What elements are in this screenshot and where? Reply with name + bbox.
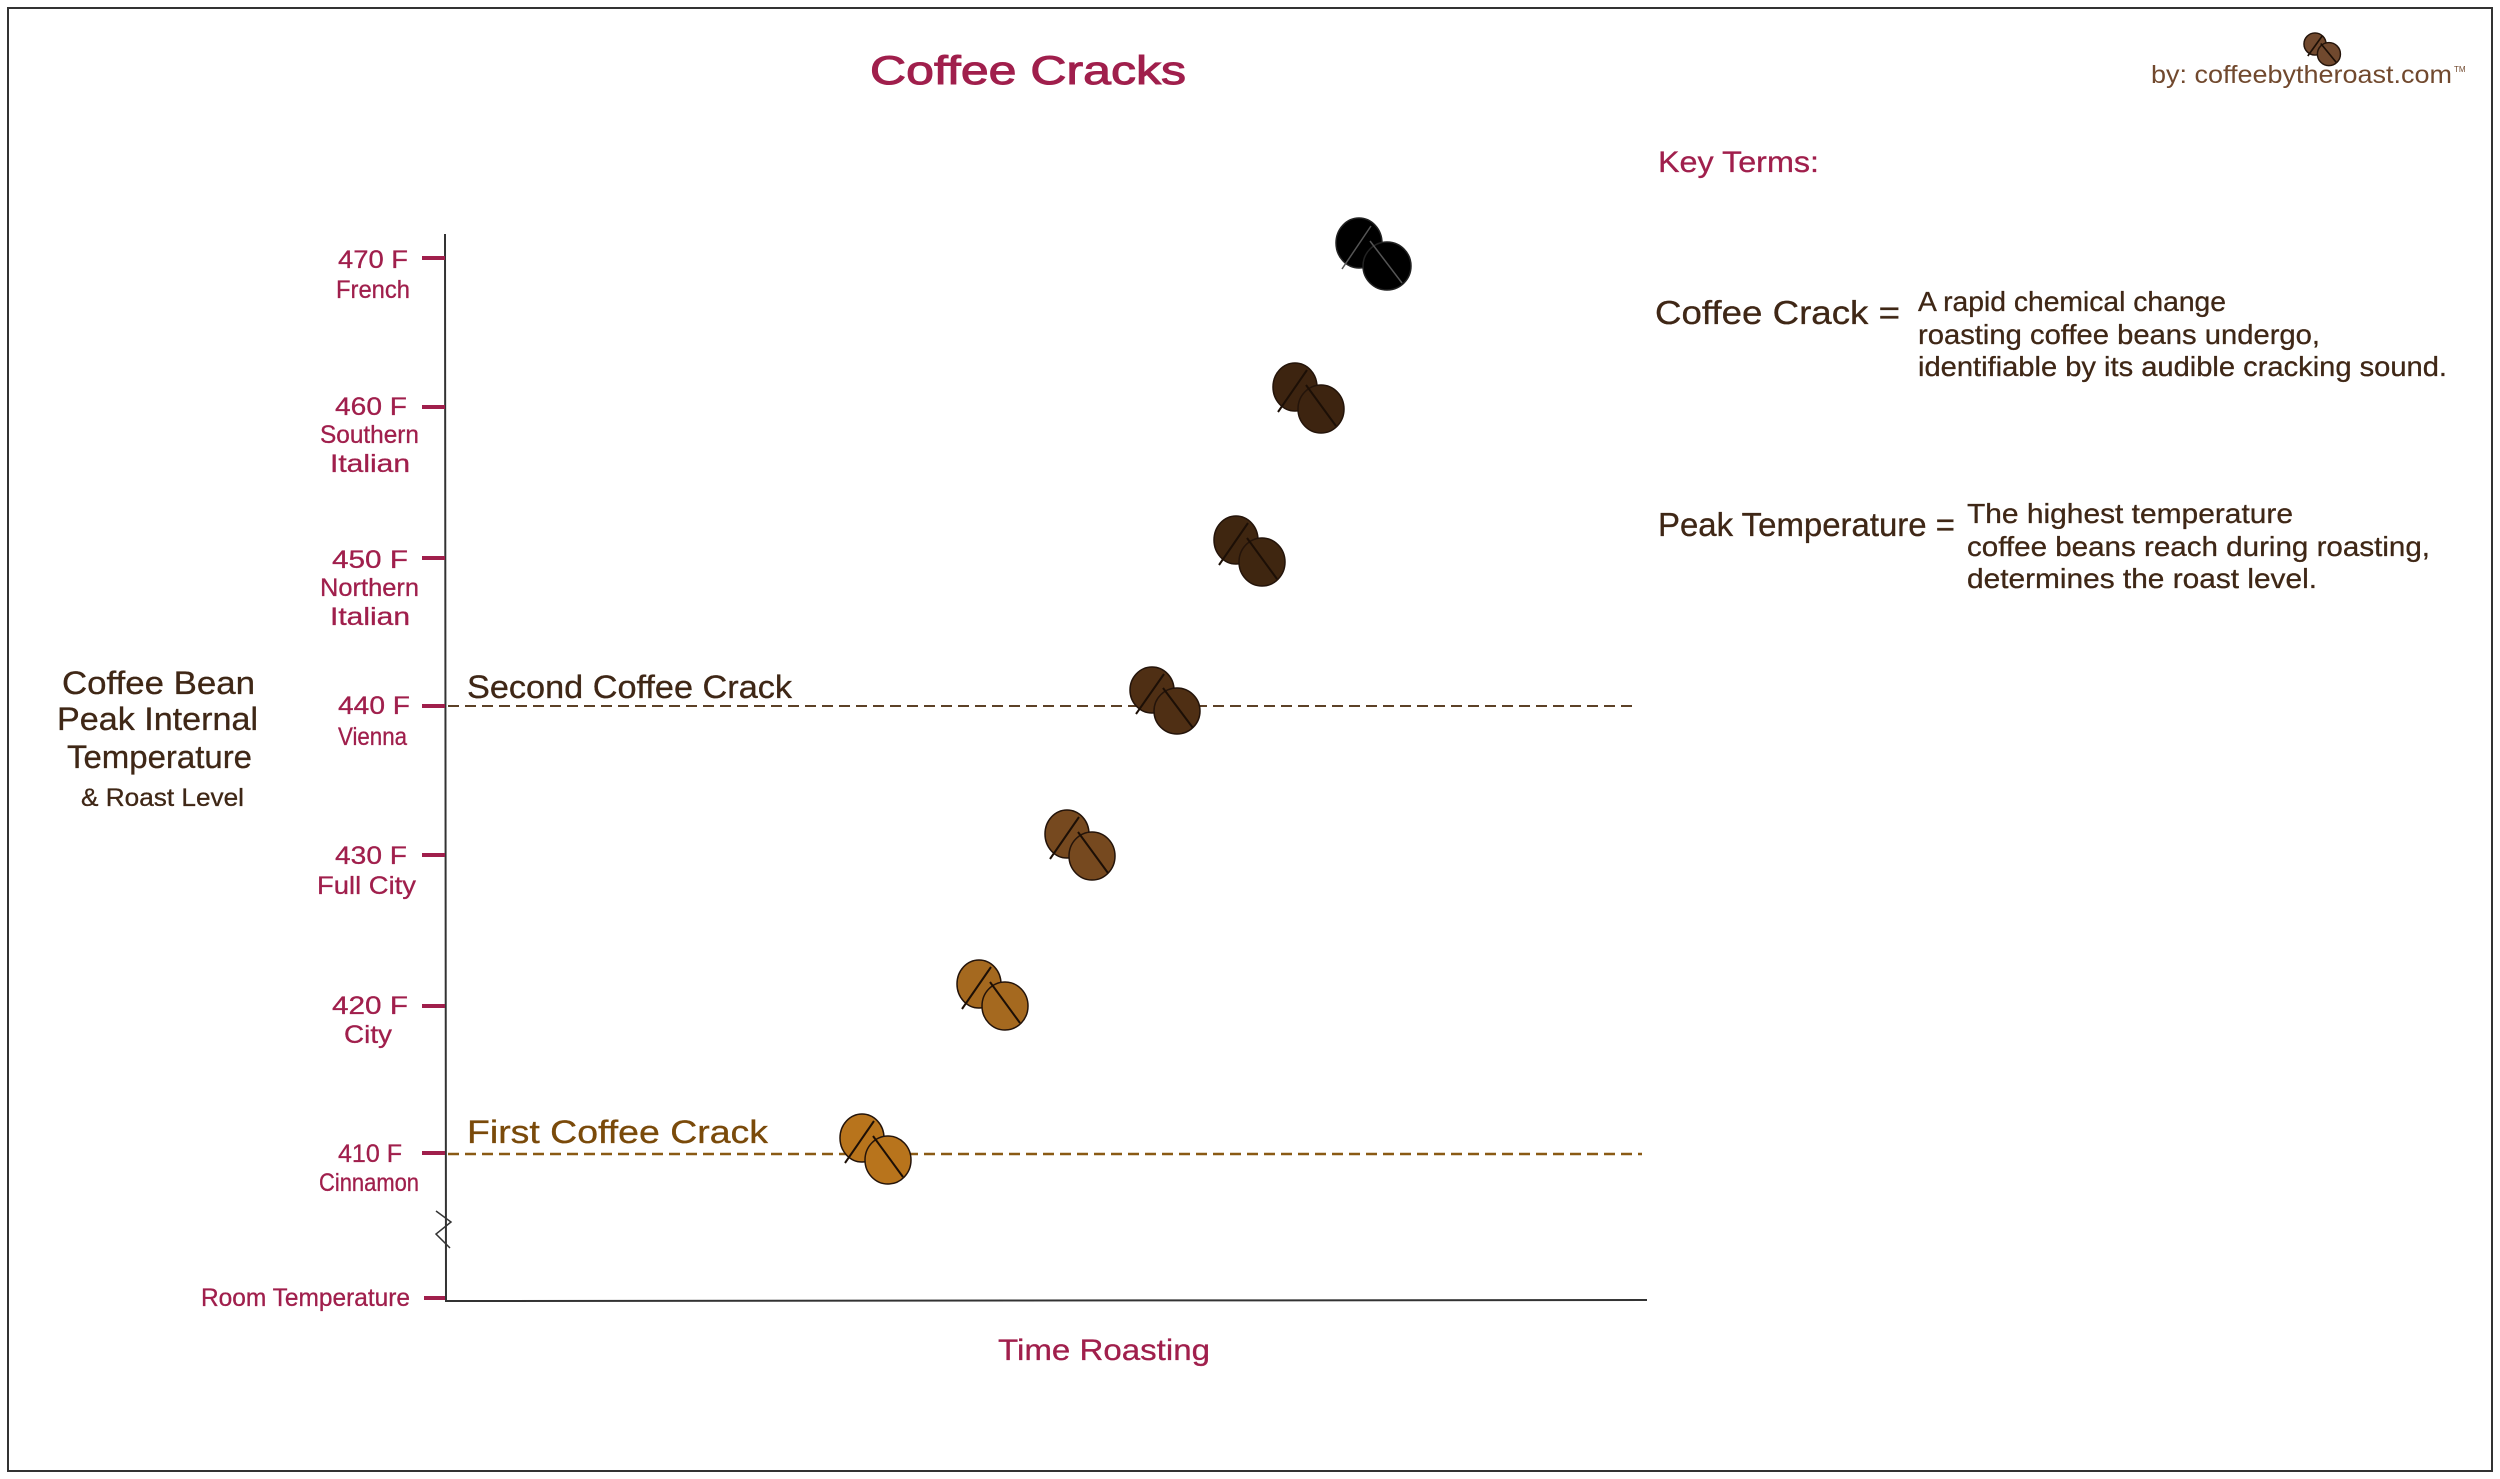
title: Coffee Cracks xyxy=(870,49,1186,93)
definition: coffee crack xyxy=(1918,286,2447,382)
y axis title: Coffee Bean xyxy=(62,665,255,701)
definition: peak temperature: coffee beans reach during roasting, xyxy=(1967,531,2430,562)
dashed line: first coffee crack xyxy=(448,1153,1642,1155)
y axis title xyxy=(57,665,258,812)
label: 470 F French: 470 F xyxy=(338,246,408,274)
logo text: by: coffeebytheroast.com xyxy=(2151,61,2452,89)
beans: cinnamon roast xyxy=(840,1114,911,1184)
definition: peak temperature: The highest temperature xyxy=(1967,498,2293,529)
definition: peak temperature xyxy=(1967,498,2430,594)
label: 460 F Southern Italian: Southern xyxy=(320,421,419,449)
beans: vienna roast xyxy=(1130,667,1200,734)
label: 450 F Northern Italian xyxy=(320,546,419,631)
label: 470 F French: French xyxy=(336,276,410,304)
label: 460 F Southern Italian xyxy=(320,393,419,478)
logo: coffee by the roast xyxy=(2151,33,2466,89)
beans: northern italian roast xyxy=(1214,516,1285,586)
y axis title: Peak Internal xyxy=(57,701,258,737)
label: 420 F City: 420 F xyxy=(332,992,408,1020)
label: 430 F Full City xyxy=(317,842,417,900)
label: 430 F Full City: 430 F xyxy=(335,842,407,870)
trademark: TM xyxy=(2454,65,2466,74)
y axis title: & Roast Level xyxy=(81,784,244,812)
definition: peak temperature: determines the roast level. xyxy=(1967,563,2317,594)
term: coffee crack: Coffee Crack = xyxy=(1655,294,1900,331)
x axis label: Time Roasting xyxy=(998,1334,1210,1367)
label: 410 F Cinnamon: Cinnamon xyxy=(319,1169,419,1197)
icon: logo bean xyxy=(2304,33,2340,66)
chart axes xyxy=(445,234,1647,1301)
label: 450 F Northern Italian: 450 F xyxy=(332,546,408,574)
key terms heading: Key Terms: xyxy=(1658,146,1819,179)
y axis title: Temperature xyxy=(67,739,252,775)
label: first coffee crack: First Coffee Crack xyxy=(467,1114,769,1150)
panel: key terms xyxy=(1655,146,2447,594)
label: 410 F Cinnamon xyxy=(319,1140,419,1197)
label: 430 F Full City: Full City xyxy=(317,872,417,900)
term: peak temperature: Peak Temperature = xyxy=(1658,506,1955,543)
beans: full city roast xyxy=(1045,810,1115,880)
y axis ticks xyxy=(422,258,445,1298)
label: 440 F Vienna xyxy=(338,692,410,751)
beans: city roast xyxy=(957,960,1028,1030)
label: 460 F Southern Italian: 460 F xyxy=(335,393,407,421)
dashed line: second coffee crack xyxy=(448,705,1637,707)
label: 440 F Vienna: 440 F xyxy=(338,692,410,720)
label: second coffee crack: Second Coffee Crack xyxy=(467,669,793,705)
definition: coffee crack: identifiable by its audible cracking sound. xyxy=(1918,351,2447,382)
label: 420 F City: City xyxy=(344,1021,393,1049)
label: room temperature: Room Temperature xyxy=(201,1284,410,1312)
definition: coffee crack: A rapid chemical change xyxy=(1918,286,2226,317)
label: 420 F City xyxy=(332,992,408,1049)
label: 470 F French xyxy=(336,246,410,304)
label: 450 F Northern Italian: Northern xyxy=(320,574,419,602)
y axis labels xyxy=(201,246,419,1312)
label: 440 F Vienna: Vienna xyxy=(338,723,407,751)
axis break mark xyxy=(436,1211,451,1248)
label: 450 F Northern Italian: Italian xyxy=(330,603,410,631)
beans: french roast xyxy=(1336,218,1411,290)
label: 410 F Cinnamon: 410 F xyxy=(338,1140,402,1168)
label: 460 F Southern Italian: Italian xyxy=(330,450,410,478)
definition: coffee crack: roasting coffee beans undergo, xyxy=(1918,319,2320,350)
beans: southern italian roast xyxy=(1273,363,1344,433)
